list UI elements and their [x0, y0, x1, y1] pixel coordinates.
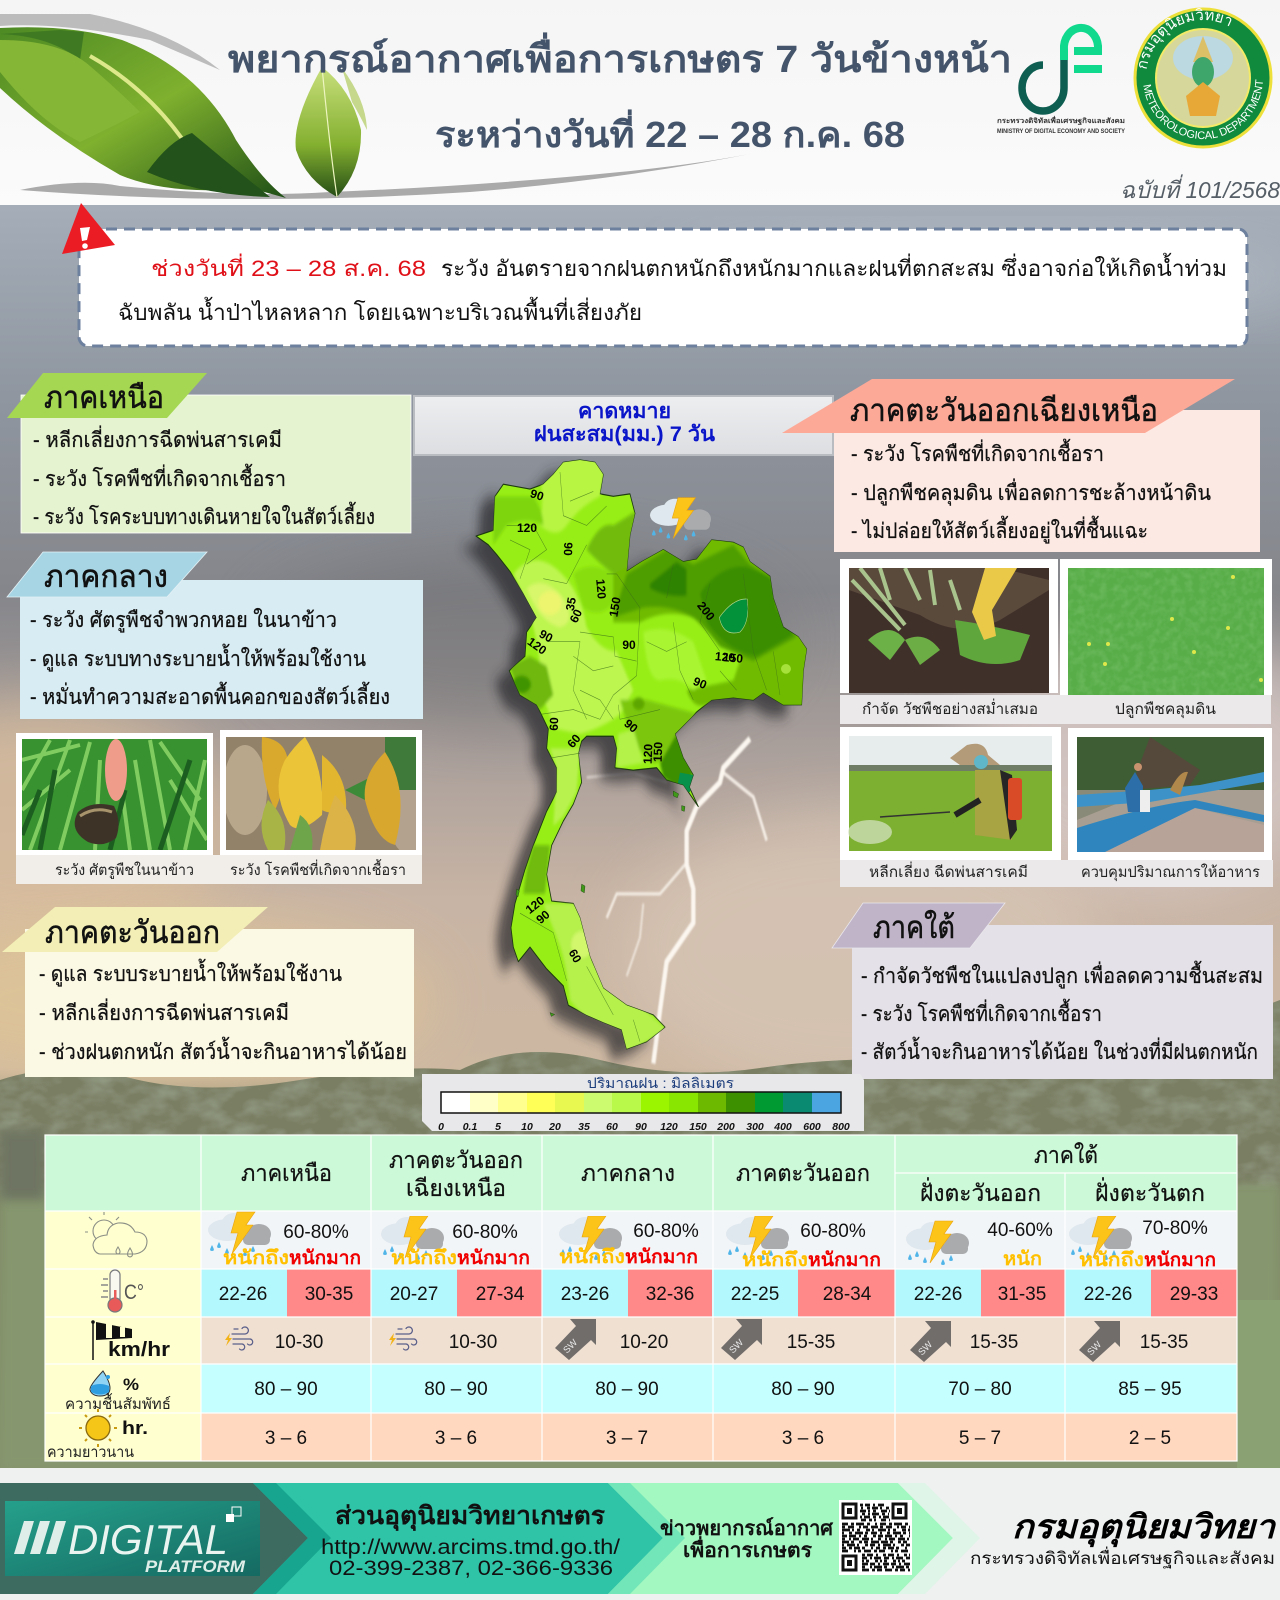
wind row: 15-35 — [787, 1332, 835, 1353]
legend heading box — [414, 396, 833, 455]
logo: meteorological department emblem: METEOROLOGICAL DEPARTMENT — [1143, 79, 1263, 140]
central advice list: - ดูแล ระบบทางระบายน้ำให้พร้อมใช้งาน — [30, 644, 366, 672]
islands — [516, 791, 685, 1016]
header band — [0, 0, 1280, 205]
sunshine row: 5 – 7 — [959, 1428, 1001, 1449]
table column headings — [241, 1142, 1205, 1206]
panel: north-east region — [782, 379, 1260, 552]
map contour labels: 120 — [641, 743, 655, 764]
footer arrow: mint section — [600, 1483, 953, 1594]
rain chance row: หนัก — [1003, 1249, 1042, 1270]
photo: fish feeding — [1068, 728, 1272, 860]
rain chance row: 70-80% — [1142, 1218, 1208, 1239]
north heading tab — [7, 373, 207, 418]
rain chance row: หนักถึง — [391, 1247, 457, 1269]
north light zones — [533, 458, 607, 533]
sunshine row: 2 – 5 — [1129, 1428, 1171, 1449]
QR caption: ข่าวพยากรณ์อากาศ — [660, 1517, 834, 1540]
legend scale labels — [438, 1121, 850, 1133]
temperature row — [219, 1284, 1218, 1305]
row icon: weather — [85, 1212, 147, 1257]
north-east gradation — [613, 535, 813, 714]
north-east heading tab — [782, 379, 1235, 433]
row icon: humidity drop — [65, 1371, 171, 1413]
icon: large leaf — [0, 27, 286, 198]
temperature row: 28-34 — [823, 1284, 872, 1305]
rain chance row: หนักมาก — [808, 1250, 881, 1271]
east advice list: - ช่วงฝนตกหนัก สัตว์น้ำจะกินอาหารได้น้อย — [39, 1037, 407, 1064]
photo: ground cover plants — [1060, 559, 1272, 695]
legend scale labels: 10 — [521, 1121, 533, 1133]
humidity row: 85 – 95 — [1118, 1379, 1182, 1400]
north-east heading: ภาคตะวันออกเฉียงเหนือ — [850, 393, 1158, 428]
photo: weeding — [840, 559, 1058, 693]
panel: north region — [7, 373, 411, 533]
rain chance row: หนักถึง — [559, 1246, 625, 1268]
east advice list — [39, 959, 407, 1064]
map contour labels: 120 — [714, 649, 736, 665]
map contour labels: 150 — [722, 650, 744, 666]
caption band: north-east photos top: กำจัด วัชพืชอย่างสม่ำเสมอ — [862, 698, 1038, 718]
map contour labels: 60 — [547, 717, 561, 731]
caption band: north-east photos bottom: หลีกเลี่ยง ฉีดพ่นสารเคมี — [869, 861, 1028, 881]
temperature row: 23-26 — [561, 1284, 609, 1305]
map contour labels: 90 — [529, 486, 546, 504]
rain chance row: 60-80% — [633, 1221, 699, 1242]
agromet division contact — [321, 1502, 620, 1580]
map contour labels: 90 — [621, 716, 641, 736]
temperature row: 29-33 — [1170, 1284, 1218, 1305]
humidity row: 80 – 90 — [424, 1379, 488, 1400]
rain chance row: หนักถึง — [1079, 1249, 1144, 1271]
south advice list: - กำจัดวัชพืชในแปลงปลูก เพื่อลดความชื้นสะสม — [861, 961, 1263, 989]
sunshine row: 3 – 6 — [435, 1428, 477, 1449]
temperature row: 22-26 — [914, 1284, 962, 1305]
wind row — [225, 1319, 1188, 1362]
humidity row: 80 – 90 — [254, 1379, 318, 1400]
wind row: 10-30 — [275, 1332, 323, 1353]
map contour labels: 90 — [537, 627, 555, 645]
rain chance row: หนักมาก — [289, 1248, 361, 1269]
sunshine row: 3 – 6 — [782, 1428, 824, 1449]
table column headings: ภาคเหนือ — [241, 1160, 332, 1186]
digital platform badge — [5, 1501, 260, 1576]
rain chance row: หนักถึง — [742, 1249, 808, 1271]
table column headings: ภาคตะวันออก — [736, 1160, 870, 1186]
agromet division contact: ส่วนอุตุนิยมวิทยาเกษตร — [335, 1502, 606, 1532]
legend scale labels: 150 — [689, 1121, 707, 1133]
caption band: north-east photos top — [840, 695, 1271, 724]
table column headings: ฝั่งตะวันตก — [1095, 1177, 1205, 1206]
table column headings: ภาคใต้ — [1034, 1142, 1098, 1168]
issue number: ฉบับที่ 101/2568 — [1120, 174, 1280, 203]
rainfall map of Thailand — [461, 458, 813, 1061]
table column headings: ภาคกลาง — [581, 1160, 675, 1186]
footer arrow: dark section — [0, 1483, 308, 1594]
legend heading box: ฝนสะสม(มม.) 7 วัน — [534, 423, 716, 446]
wind row: 10-20 — [620, 1332, 668, 1353]
legend scale labels: 200 — [716, 1121, 735, 1133]
map contour labels: 35 — [563, 596, 579, 612]
humidity row — [254, 1379, 1182, 1400]
swoosh shadow — [20, 152, 760, 199]
rain chance row — [208, 1212, 1216, 1271]
alert box: ฉับพลัน น้ำป่าไหลหลาก โดยเฉพาะบริเวณพื้นที่เสี่ยงภัย — [118, 297, 642, 325]
row icon: sunshine: ความยาวนาน — [47, 1444, 134, 1461]
temperature row: 31-35 — [998, 1284, 1046, 1305]
department name: กรมอุตุนิยมวิทยา — [1012, 1508, 1277, 1548]
department name: กระทรวงดิจิทัลเพื่อเศรษฐกิจและสังคม — [970, 1546, 1275, 1569]
digital platform badge: DIGITAL — [68, 1516, 228, 1563]
legend scale labels: 5 — [495, 1121, 501, 1133]
sunshine row — [265, 1428, 1171, 1449]
rain chance row: หนักถึง — [223, 1247, 289, 1269]
legend scale labels: 0 — [438, 1121, 444, 1133]
south advice list: - ระวัง โรคพืชที่เกิดจากเชื้อรา — [861, 999, 1102, 1026]
legend scale labels: 300 — [746, 1121, 764, 1133]
north-east advice list: - ระวัง โรคพืชที่เกิดจากเชื้อรา — [851, 439, 1104, 466]
title: พยากรณ์อากาศเพื่อการเกษตร 7 วันข้างหน้า — [228, 32, 1012, 81]
map contour labels — [517, 486, 744, 966]
photo: leaf fungal disease — [220, 730, 432, 855]
rain chance row: 60-80% — [283, 1222, 349, 1243]
logo: ministry of digital economy: กระทรวงดิจิทัลเพื่อเศรษฐกิจและสังคม — [997, 115, 1125, 126]
row icon: humidity drop: ความชื้นสัมพัทธ์ — [65, 1393, 171, 1413]
north advice list: - หลีกเลี่ยงการฉีดพ่นสารเคมี — [33, 425, 282, 452]
central advice list — [30, 608, 390, 709]
icon: storm cloud above map — [650, 498, 711, 540]
caption band: left photos — [16, 855, 422, 884]
north-east advice list — [851, 439, 1211, 544]
map contour labels: 90 — [533, 907, 553, 927]
map contour labels: 120 — [523, 893, 547, 917]
south heading tab — [832, 903, 1005, 948]
agromet division contact: http://www.arcims.tmd.go.th/ — [321, 1536, 620, 1559]
south advice list — [861, 961, 1263, 1064]
province boundaries — [507, 472, 780, 1042]
temperature row: 30-35 — [305, 1284, 353, 1305]
rain chance row: หนักมาก — [1144, 1250, 1216, 1271]
map contour labels: 60 — [564, 731, 584, 751]
icon: small leaf — [296, 67, 367, 197]
digital platform badge: PLATFORM — [145, 1557, 246, 1576]
rain chance row: หนักมาก — [625, 1247, 698, 1268]
central advice list: - หมั่นทำความสะอาดพื้นคอกของสัตว์เลี้ยง — [30, 682, 390, 709]
north darker zones — [493, 496, 543, 545]
sunshine row: 3 – 6 — [265, 1428, 307, 1449]
alert box — [79, 229, 1247, 346]
logo: meteorological department emblem — [1134, 8, 1272, 148]
rain chance row: 60-80% — [452, 1222, 518, 1243]
table column headings: ภาคตะวันออก — [389, 1147, 523, 1173]
rain chance row: หนักมาก — [457, 1248, 530, 1269]
caption band: north-east photos bottom — [840, 860, 1273, 887]
legend scale labels: 35 — [578, 1121, 590, 1133]
QR caption: เพื่อการเกษตร — [683, 1535, 812, 1562]
map contour labels: 90 — [691, 674, 709, 692]
map contour labels: 120 — [525, 635, 549, 658]
central heading: ภาคกลาง — [44, 559, 168, 594]
north-east advice list: - ไม่ปล่อยให้สัตว์เลี้ยงอยู่ในที่ชื้นแฉะ — [851, 516, 1148, 544]
south heading: ภาคใต้ — [873, 910, 955, 945]
panel: east region — [2, 907, 414, 1077]
legend colour bar — [441, 1092, 841, 1113]
north advice list — [33, 425, 375, 529]
west and south-east dark zones — [509, 656, 553, 710]
map contour labels: 120 — [593, 578, 609, 600]
QR code — [839, 1500, 912, 1575]
panel: south region — [832, 903, 1273, 1079]
forecast table — [45, 1135, 1237, 1461]
rain chance row: 60-80% — [800, 1221, 866, 1242]
photo: farmer spraying — [840, 727, 1061, 860]
legend scale labels: 60 — [606, 1121, 618, 1133]
QR caption — [660, 1517, 834, 1562]
sunshine row: 3 – 7 — [606, 1428, 648, 1449]
agromet division contact: 02-399-2387, 02-366-9336 — [329, 1557, 613, 1580]
temperature row: 32-36 — [646, 1284, 694, 1305]
rain chance row: 40-60% — [987, 1220, 1053, 1241]
north-east advice list: - ปลูกพืชคลุมดิน เพื่อลดการชะล้างหน้าดิน — [851, 478, 1211, 506]
north advice list: - ระวัง โรคระบบทางเดินหายใจในสัตว์เลี้ยง — [33, 502, 375, 529]
subtitle: ระหว่างวันที่ 22 – 28 ก.ค. 68 — [435, 109, 905, 155]
rainfall colour legend — [422, 1074, 864, 1133]
logo: meteorological department emblem: กรมอุตุนิยมวิทยา — [1139, 8, 1232, 69]
map contour labels: 150 — [651, 741, 665, 762]
caption band: left photos: ระวัง โรคพืชที่เกิดจากเชื้อรา — [230, 859, 406, 879]
map contour labels: 60 — [566, 947, 585, 966]
central heading tab — [7, 552, 207, 597]
east heading: ภาคตะวันออก — [45, 915, 220, 950]
row icon: wind sock with unit: km/hr — [108, 1339, 170, 1361]
east advice list: - ดูแล ระบบระบายน้ำให้พร้อมใช้งาน — [39, 959, 342, 987]
temperature row: 27-34 — [476, 1284, 525, 1305]
legend scale labels: 20 — [548, 1121, 561, 1133]
logo: ministry of digital economy: MINISTRY OF DIGITAL ECONOMY AND SOCIETY — [997, 129, 1125, 135]
map contour labels: 200 — [694, 599, 718, 623]
legend heading box: คาดหมาย — [578, 400, 671, 423]
temperature row: 22-26 — [1084, 1284, 1132, 1305]
icon: warning triangle — [62, 203, 115, 254]
footer band — [0, 1468, 1280, 1600]
table column headings: ฝั่งตะวันออก — [920, 1177, 1041, 1206]
alert box: ระวัง อันตรายจากฝนตกหนักถึงหนักมากและฝนที่ตกสะสม ซึ่งอาจก่อให้เกิดน้ำท่วม — [441, 253, 1227, 281]
legend scale labels: 400 — [773, 1121, 792, 1133]
legend scale labels: 0.1 — [463, 1121, 477, 1133]
table column headings: เฉียงเหนือ — [406, 1175, 506, 1201]
department name — [970, 1508, 1277, 1569]
wind row: 15-35 — [1140, 1332, 1188, 1353]
row icon: thermometer — [101, 1270, 144, 1312]
caption band: north-east photos top: ปลูกพืชคลุมดิน — [1115, 701, 1216, 719]
wind row: 15-35 — [970, 1332, 1018, 1353]
legend scale labels: 600 — [803, 1121, 821, 1133]
panel: central region — [7, 552, 423, 719]
wind row: 10-30 — [449, 1332, 497, 1353]
map contour labels: 90 — [622, 638, 636, 652]
east advice list: - หลีกเลี่ยงการฉีดพ่นสารเคมี — [39, 998, 289, 1025]
footer arrow: teal section — [245, 1483, 663, 1594]
row icon: sunshine — [47, 1409, 148, 1461]
row icon: thermometer: C° — [124, 1281, 144, 1304]
alert box: ช่วงวันที่ 23 – 28 ส.ค. 68 — [151, 253, 426, 281]
north advice list: - ระวัง โรคพืชที่เกิดจากเชื้อรา — [33, 464, 286, 491]
temperature row: 22-25 — [731, 1284, 779, 1305]
row icon: humidity drop: % — [123, 1375, 139, 1394]
row icon: sunshine: hr. — [122, 1418, 148, 1438]
legend scale labels: 120 — [660, 1121, 678, 1133]
central advice list: - ระวัง ศัตรูพืชจำพวกหอย ในนาข้าว — [30, 608, 337, 633]
legend scale labels: 90 — [635, 1121, 647, 1133]
north heading: ภาคเหนือ — [44, 380, 164, 415]
map contour labels: 120 — [517, 521, 537, 535]
caption band: left photos: ระวัง ศัตรูพืชในนาข้าว — [55, 861, 194, 879]
humidity row: 80 – 90 — [771, 1379, 835, 1400]
humidity row: 70 – 80 — [948, 1379, 1012, 1400]
photo: apple snail eggs — [16, 733, 213, 855]
logo: ministry of digital economy — [997, 28, 1125, 135]
row icon: wind sock with unit — [91, 1320, 170, 1361]
rainfall colour legend: ปริมาณฝน : มิลลิเมตร — [587, 1075, 735, 1091]
map contour labels: 90 — [561, 542, 575, 556]
map contour labels: 150 — [606, 596, 624, 618]
temperature row: 20-27 — [390, 1284, 438, 1305]
temperature row: 22-26 — [219, 1284, 267, 1305]
map contour labels: 60 — [567, 607, 585, 625]
humidity row: 80 – 90 — [595, 1379, 659, 1400]
east heading tab — [2, 907, 268, 952]
table row backgrounds — [45, 1135, 1237, 1461]
caption band: north-east photos bottom: ควบคุมปริมาณการให้อาหาร — [1081, 863, 1260, 882]
legend scale labels: 800 — [832, 1121, 850, 1133]
